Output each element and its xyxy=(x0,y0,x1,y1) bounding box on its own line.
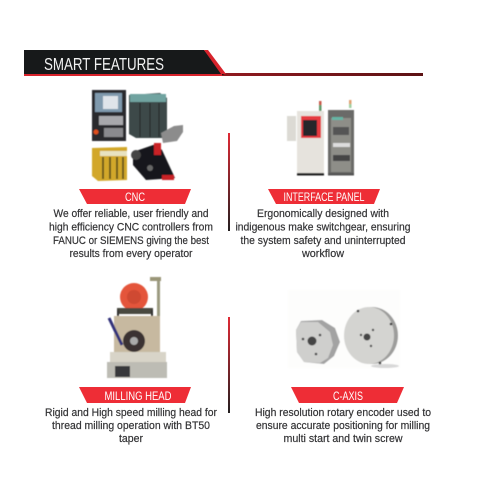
text: interface panel description: workflow xyxy=(301,248,345,260)
text: milling head description: Rigid and High speed milling head for xyxy=(45,407,217,419)
text: interface panel description: indigenous make switchgear, ensuring xyxy=(236,222,410,234)
text: C-axis description: High resolution rotary encoder used to xyxy=(255,407,431,419)
label: milling head: MILLING HEAD xyxy=(104,390,172,403)
text: milling head description: thread milling operation with BT50 xyxy=(52,420,210,432)
text: CNC description: We offer reliable, user friendly and xyxy=(54,208,208,220)
text: CNC description xyxy=(49,208,213,260)
panel: milling head xyxy=(45,277,217,445)
panel: CNC xyxy=(49,90,213,260)
text: CNC description: FANUC or SIEMENS giving the best xyxy=(53,235,210,247)
label: interface panel: INTERFACE PANEL xyxy=(284,191,365,204)
icon: rotary encoders photo xyxy=(288,290,400,368)
panel: interface panel xyxy=(236,100,410,260)
icon: CNC controllers photo xyxy=(92,90,183,181)
label: milling head xyxy=(79,387,191,403)
text: interface panel description: the system safety and uninterrupted xyxy=(240,235,406,247)
text: interface panel description xyxy=(236,208,410,260)
label: CNC: CNC xyxy=(125,191,145,204)
divider: lower xyxy=(228,317,230,413)
text: C-axis description xyxy=(255,407,431,445)
header band xyxy=(24,50,423,76)
divider: upper xyxy=(228,133,230,231)
label: CNC xyxy=(79,189,191,204)
icon: milling head photo xyxy=(107,277,167,378)
title: SMART FEATURES xyxy=(44,54,164,74)
panel: C-axis xyxy=(255,290,431,445)
text: C-axis description: ensure accurate positioning for milling xyxy=(256,420,430,432)
label: C-axis: C-AXIS xyxy=(333,390,363,403)
icon: electrical cabinets photo xyxy=(287,100,354,176)
text: milling head description xyxy=(45,407,217,445)
text: C-axis description: multi start and twin screw xyxy=(284,433,403,445)
text: interface panel description: Ergonomically designed with xyxy=(257,208,389,220)
text: CNC description: results from every operator xyxy=(70,248,193,260)
text: CNC description: high efficiency CNC controllers from xyxy=(49,222,213,234)
label: C-axis xyxy=(291,387,404,403)
text: milling head description: taper xyxy=(119,433,143,445)
label: interface panel xyxy=(268,189,380,204)
